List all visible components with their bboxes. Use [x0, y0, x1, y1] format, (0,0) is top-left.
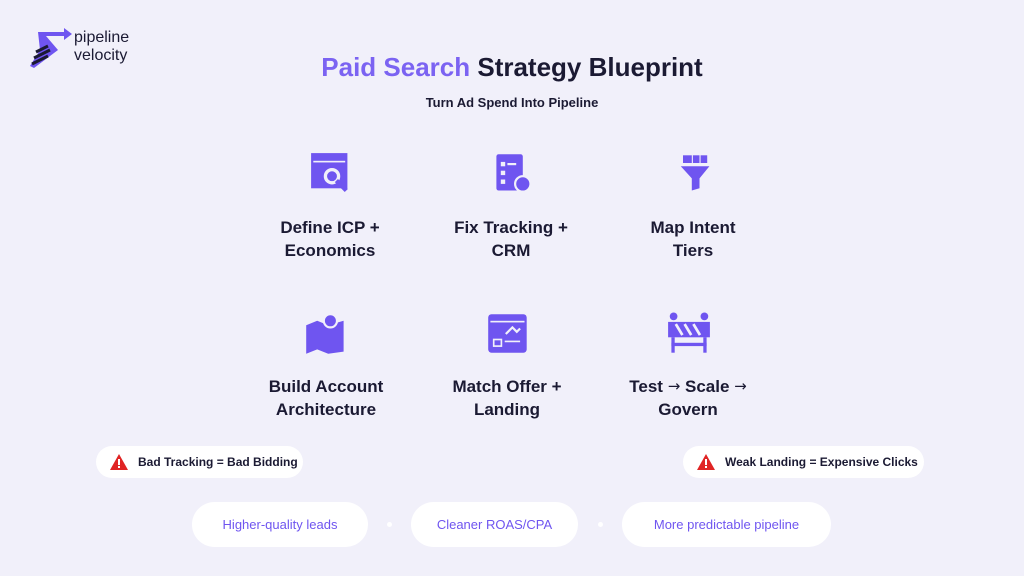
- icon: landing page: [488, 314, 527, 353]
- label: Build Account: Architecture: [276, 400, 376, 419]
- label: Define ICP: Economics: [285, 241, 375, 260]
- outcome: pipeline: More predictable pipeline: [654, 517, 799, 532]
- logo: pipeline: [74, 29, 129, 46]
- label: Define ICP: Define ICP +: [280, 218, 380, 237]
- label: Test Scale Govern: [629, 377, 747, 419]
- icon: map: [306, 315, 344, 354]
- title: Paid Search Strategy Blueprint: [321, 52, 703, 82]
- label: Build Account: Build Account: [269, 377, 383, 396]
- outcome: leads: Higher-quality leads: [223, 517, 337, 532]
- label: Fix Tracking: CRM: [492, 241, 530, 260]
- warning: bad tracking: [96, 446, 303, 478]
- warning: bad tracking: Bad Tracking = Bad Bidding: [138, 455, 298, 469]
- label: Map Intent: Map Intent: [650, 218, 736, 237]
- icon: checklist: [496, 154, 530, 190]
- warning: weak landing: [683, 446, 924, 478]
- label: Fix Tracking: Fix Tracking +: [454, 218, 568, 237]
- subtitle: Turn Ad Spend Into Pipeline: [426, 95, 598, 110]
- warning: weak landing: Weak Landing = Expensive Clicks: [725, 455, 918, 469]
- logo: [30, 28, 129, 68]
- label: Match Offer: Match Offer +: [452, 377, 562, 396]
- outcome: roas: [411, 502, 578, 547]
- label: Define ICP: [280, 218, 380, 260]
- label: Fix Tracking: [454, 218, 568, 260]
- label: Match Offer: Landing: [474, 400, 540, 419]
- outcome: roas: Cleaner ROAS/CPA: [437, 517, 552, 532]
- icon: funnel: [680, 155, 710, 190]
- logo: velocity: [74, 47, 127, 64]
- icon: barrier: [668, 312, 710, 353]
- label: Test Scale Govern: Govern: [658, 400, 718, 419]
- icon: browser search: [311, 153, 348, 192]
- outcome: leads: [192, 502, 368, 547]
- label: Map Intent: Tiers: [673, 241, 713, 260]
- label: Test Scale Govern: Test → Scale →: [629, 377, 747, 396]
- label: Map Intent: [650, 218, 736, 260]
- label: Build Account: [269, 377, 384, 419]
- label: Match Offer: [452, 377, 562, 419]
- outcome: pipeline: [622, 502, 831, 547]
